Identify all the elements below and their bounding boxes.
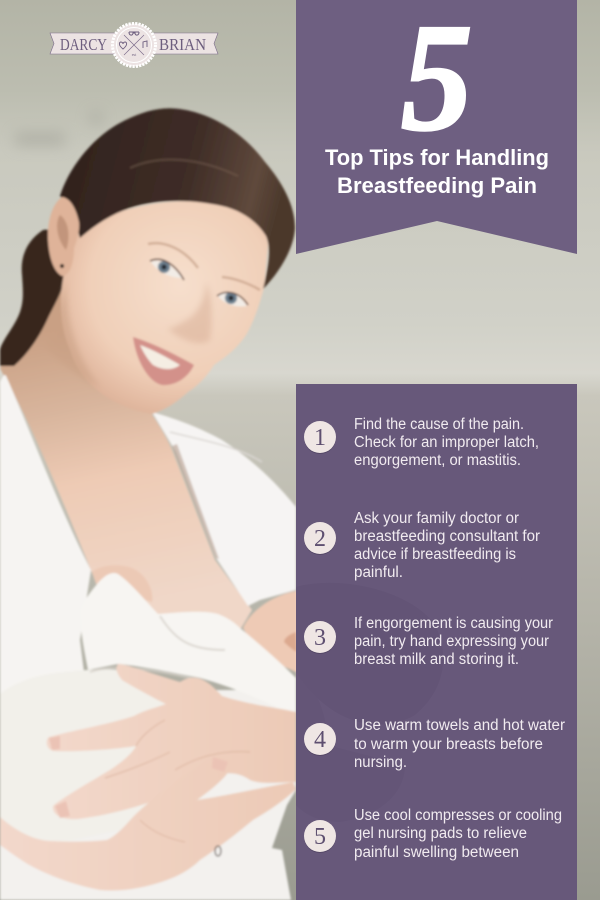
- nose shadow: [167, 282, 212, 343]
- tip 4 text: nursing.: [354, 754, 407, 771]
- hair: [60, 108, 295, 289]
- faint photo shapes through panel: [296, 583, 443, 822]
- tip 1 text: Find the cause of the pain.: [354, 416, 524, 433]
- tip 3 text: [354, 615, 553, 668]
- badge small text: est: [132, 52, 137, 57]
- baby hand on breast: [92, 565, 152, 602]
- tip 1 text: engorgement, or mastitis.: [354, 452, 521, 469]
- icon: glasses: [129, 32, 139, 35]
- shirt right sleeve: [152, 412, 296, 606]
- tip 2 text: painful.: [354, 564, 403, 581]
- heading: Top Tips for Handling: [325, 145, 549, 170]
- tip 5 text: painful swelling between: [354, 844, 519, 861]
- tip 2: [304, 510, 540, 581]
- tip 5 text: [354, 807, 562, 861]
- sleeve crease shadows: [90, 616, 225, 680]
- tip 1 text: Check for an improper latch,: [354, 434, 539, 451]
- tip 4 text: to warm your breasts before: [354, 736, 543, 753]
- tip 5 text: gel nursing pads to relieve: [354, 825, 527, 842]
- number badge 1: 1: [314, 425, 326, 451]
- tip 3 text: pain, try hand expressing your: [354, 633, 549, 650]
- tip 2 text: [354, 510, 540, 581]
- number badge 3: 3: [314, 625, 326, 651]
- lower hand and forearm: [0, 757, 296, 891]
- mouth: [133, 337, 194, 385]
- baby sleeve: [80, 573, 296, 716]
- tip 5 text: Use cool compresses or cooling: [354, 807, 562, 824]
- panel background: [296, 384, 577, 900]
- logo name right: BRIAN: [159, 35, 206, 54]
- blurred room details: [15, 111, 103, 146]
- tip 3: [304, 615, 553, 668]
- wedding ring: [215, 846, 221, 856]
- header banner: [296, 0, 577, 254]
- number badge 5: 5: [314, 824, 326, 850]
- tip 5: [304, 807, 562, 861]
- earring: [60, 264, 64, 268]
- number badge 4: 4: [314, 727, 326, 753]
- logo name left: DARCY: [60, 35, 107, 54]
- white torso base: [0, 690, 296, 900]
- shirt left panel: [0, 375, 91, 700]
- sleeve seam shading: [170, 432, 262, 462]
- baby ear: [284, 632, 297, 652]
- number badge 2: 2: [314, 526, 326, 552]
- number badge 1: [304, 421, 336, 454]
- number badge 3: [304, 621, 336, 654]
- eyebrows: [148, 243, 260, 290]
- tip 2 text: breastfeeding consultant for: [354, 528, 540, 545]
- heading: [325, 145, 549, 198]
- sleeve fold shading: [172, 444, 219, 559]
- right eye: [217, 292, 248, 307]
- upper hand: [47, 664, 296, 819]
- logo badge: [112, 24, 156, 66]
- ear: [48, 197, 79, 276]
- swaddle blanket: [0, 669, 200, 845]
- number badge 4: [304, 723, 336, 756]
- tip 4 text: Use warm towels and hot water: [354, 717, 565, 734]
- logo ribbon: [50, 33, 218, 54]
- icon: heart: [119, 42, 127, 49]
- left eye: [150, 259, 184, 280]
- inner ear: [57, 215, 68, 250]
- hair highlight: [130, 160, 238, 176]
- heading: Breastfeeding Pain: [337, 173, 537, 198]
- tip 1 text: [354, 416, 539, 469]
- tip 1: [304, 416, 539, 469]
- number badge 5: [304, 820, 336, 853]
- banner shape: [296, 0, 577, 254]
- neck and chest skin: [0, 290, 252, 630]
- tip 2 text: advice if breastfeeding is: [354, 546, 516, 563]
- tip 2 text: Ask your family doctor or: [354, 510, 519, 527]
- icon: music note: [143, 41, 147, 48]
- hair bun: [0, 228, 66, 366]
- tip 3 text: If engorgement is causing your: [354, 615, 553, 632]
- jaw shadow: [45, 280, 100, 388]
- baby head: [243, 591, 340, 672]
- tips panel: [296, 384, 577, 900]
- tip 4: [304, 717, 565, 771]
- number badge 2: [304, 522, 336, 555]
- logo: [50, 24, 218, 66]
- tip 4 text: [354, 717, 565, 771]
- photo: mother and baby: [0, 108, 340, 900]
- face: [61, 201, 268, 414]
- tip 3 text: breast milk and storing it.: [354, 651, 519, 668]
